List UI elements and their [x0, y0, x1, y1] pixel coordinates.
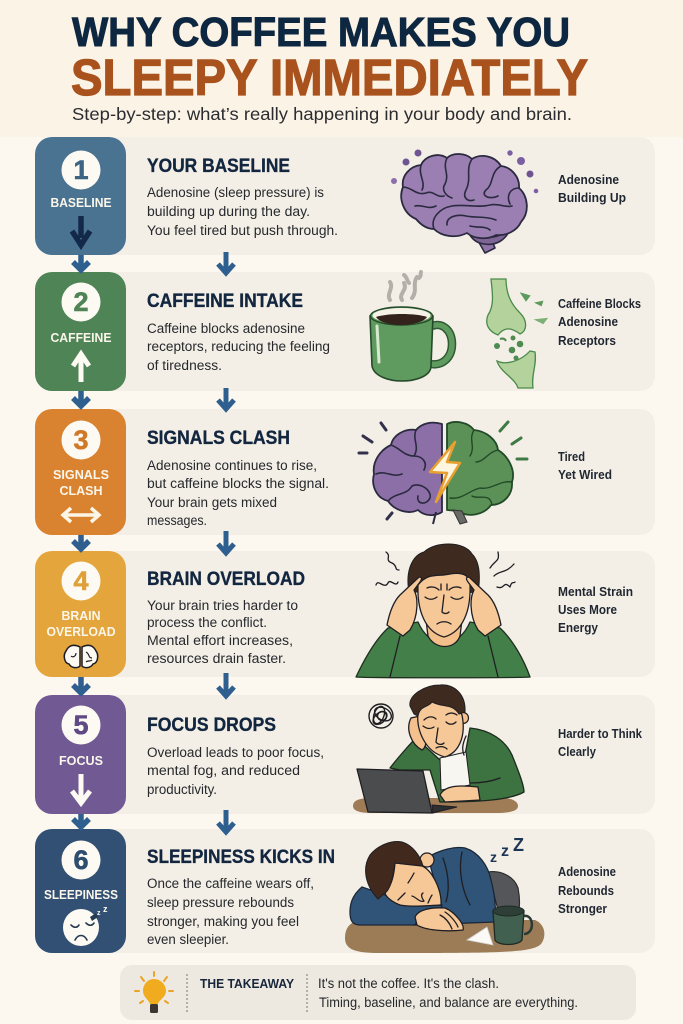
body text: Adenosine continues to rise,	[147, 458, 317, 473]
body text: messages.	[147, 513, 207, 528]
body text	[147, 876, 314, 947]
caption	[558, 173, 626, 205]
body text	[147, 185, 338, 238]
badge: step 3: CLASH	[60, 484, 102, 498]
badge: step 5	[35, 695, 126, 814]
heading: SIGNALS CLASH	[147, 428, 290, 449]
body text: stronger, making you feel	[147, 914, 299, 929]
icon: sleepy face: z	[103, 904, 108, 914]
caption: Harder to Think	[558, 727, 642, 741]
badge: step 4: 4	[73, 566, 89, 596]
takeaway label: THE TAKEAWAY	[200, 976, 294, 991]
takeaway text: Timing, baseline, and balance are everything.	[319, 995, 578, 1010]
panel: step 2 caffeine	[35, 272, 655, 391]
illustration: man asleep on desk: Z	[513, 835, 524, 855]
heading: CAFFEINE INTAKE	[147, 291, 303, 312]
body text: but caffeine blocks the signal.	[147, 476, 329, 491]
heading: SLEEPINESS KICKS IN	[147, 847, 335, 868]
illustration: green coffee mug	[370, 272, 452, 381]
caption: Yet Wired	[558, 468, 612, 482]
panel: step 4 brain overload	[35, 544, 655, 678]
body text	[147, 321, 330, 373]
badge: step 2: CAFFEINE	[50, 331, 112, 345]
caption	[558, 297, 641, 348]
illustration: tired man at laptop	[353, 685, 524, 813]
caption: Clearly	[558, 745, 596, 759]
badge: step 5: 5	[73, 710, 89, 740]
caption	[558, 865, 616, 916]
body text: of tiredness.	[147, 358, 222, 373]
subtitle: Step-by-step: what’s really happening in your body and brain.	[72, 104, 572, 124]
caption: Uses More	[558, 603, 617, 617]
icon: lightbulb	[135, 972, 173, 1013]
badge: step 4: BRAIN	[62, 609, 100, 623]
body text: even sleepier.	[147, 932, 229, 947]
body text	[147, 458, 329, 528]
takeaway text: It's not the coffee. It's the clash.	[318, 976, 499, 991]
illustration: man asleep on desk	[345, 835, 544, 953]
arrows: left connector column	[73, 255, 89, 827]
caption: Caffeine Blocks	[558, 297, 641, 311]
body text: Adenosine (sleep pressure) is	[147, 185, 324, 200]
caption: Energy	[558, 621, 598, 635]
badge: step 1: 1	[73, 155, 89, 185]
body text: Overload leads to poor focus,	[147, 745, 324, 760]
heading: YOUR BASELINE	[147, 156, 290, 177]
badge: step 3	[35, 409, 126, 535]
caption: Building Up	[558, 191, 626, 205]
caption: Adenosine	[558, 315, 618, 329]
badge: step 6	[35, 829, 126, 953]
badge: step 2	[35, 272, 126, 391]
body text: building up during the day.	[147, 204, 310, 219]
panel: step 1 baseline	[35, 137, 655, 255]
body text: Once the caffeine wears off,	[147, 876, 314, 891]
caption: Receptors	[558, 334, 616, 348]
body text: productivity.	[147, 782, 217, 797]
caption: Tired	[558, 450, 585, 464]
takeaway text	[318, 976, 578, 1010]
badge: step 5: FOCUS	[59, 754, 103, 768]
body text: mental fog, and reduced	[147, 763, 300, 778]
illustration: split brain	[359, 422, 527, 524]
illustration: man asleep on desk: z	[501, 843, 509, 860]
body text	[147, 598, 298, 666]
badge: step 4	[35, 551, 126, 677]
body text	[147, 745, 324, 797]
body text: process the conflict.	[147, 615, 267, 630]
illustration: purple brain	[391, 150, 538, 253]
body text: resources drain faster.	[147, 651, 286, 666]
badge: step 4: OVERLOAD	[46, 625, 116, 639]
badge: step 6: SLEEPINESS	[44, 888, 118, 902]
caption	[558, 727, 642, 759]
heading: BRAIN OVERLOAD	[147, 569, 305, 590]
takeaway box	[120, 965, 636, 1020]
icon: overloaded brain	[64, 645, 98, 668]
body text: Caffeine blocks adenosine	[147, 321, 305, 336]
caption: Adenosine	[558, 173, 619, 187]
title line 1: WHY COFFEE MAKES YOU	[72, 9, 570, 55]
badge: step 3: 3	[73, 425, 89, 455]
badge: step 2: 2	[73, 287, 89, 317]
illustration: synapse	[487, 279, 546, 388]
caption: Rebounds	[558, 884, 614, 898]
panel: step 3 signals clash	[35, 409, 655, 535]
heading: FOCUS DROPS	[147, 715, 276, 736]
caption: Mental Strain	[558, 585, 633, 599]
icon: sleepy face	[63, 904, 108, 946]
header	[71, 9, 588, 124]
body text: Your brain tries harder to	[147, 598, 298, 613]
caption: Stronger	[558, 902, 607, 916]
icon: sleepy face: z	[97, 910, 101, 917]
panel: step 5 focus drops	[35, 685, 655, 814]
arrows: second connector column	[218, 252, 234, 832]
caption	[558, 585, 633, 635]
badge: step 1	[35, 137, 126, 255]
badge: step 3: SIGNALS	[53, 468, 109, 482]
title line 2: SLEEPY IMMEDIATELY	[71, 49, 588, 106]
illustration: man asleep on desk: z	[490, 849, 497, 865]
body text: Your brain gets mixed	[147, 495, 277, 510]
caption	[558, 450, 612, 482]
badge: step 1: BASELINE	[50, 196, 112, 210]
panel: step 6 sleepiness	[35, 829, 655, 953]
body text: Mental effort increases,	[147, 633, 293, 648]
body text: You feel tired but push through.	[147, 223, 338, 238]
badge: step 6: 6	[73, 845, 89, 875]
body text: receptors, reducing the feeling	[147, 339, 330, 354]
caption: Adenosine	[558, 865, 616, 879]
body text: sleep pressure rebounds	[147, 895, 294, 910]
illustration: man holding temples	[356, 544, 530, 678]
